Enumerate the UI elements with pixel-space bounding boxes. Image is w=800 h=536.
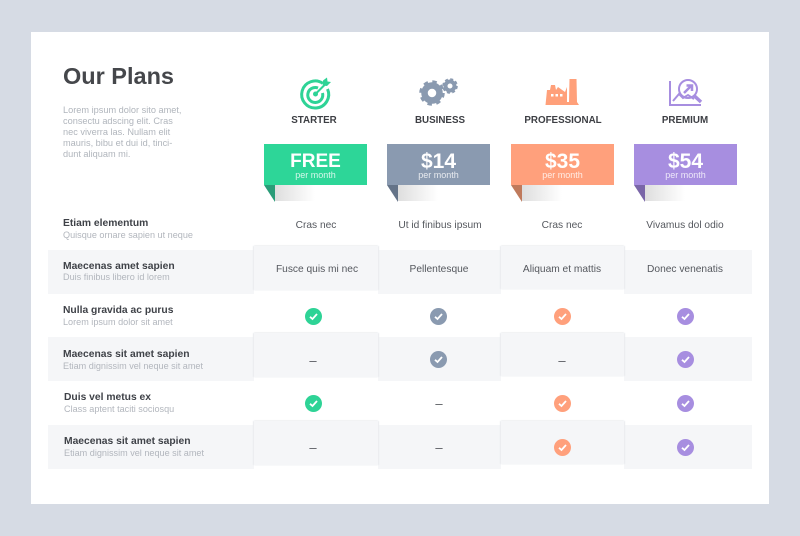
check: row 3 starter — [305, 308, 322, 325]
check: row 5 premium — [677, 395, 694, 412]
intro text block: Lorem ipsum dolor sito amet, — [63, 105, 181, 115]
price tag: 35: $35 — [545, 150, 580, 173]
row label 4 — [63, 349, 203, 371]
row label 2: Maecenas amet sapien — [63, 261, 175, 272]
row label 6: Maecenas sit amet sapien — [64, 436, 190, 447]
cell text row 1 business: Ut id finibus ipsum — [398, 220, 482, 231]
icon: gears — [419, 78, 458, 106]
raised cell: starter row 6 — [254, 421, 378, 465]
cell text row 2 professional: Aliquam et mattis — [523, 264, 601, 275]
dash: row 5 business: – — [435, 396, 443, 411]
intro text block: nec viverra las. Nullam elit — [63, 127, 170, 137]
price tag: 35: per month — [542, 170, 583, 180]
row label 3: Nulla gravida ac purus — [63, 305, 173, 316]
price tag: 54 — [634, 144, 737, 202]
check: row 4 premium — [677, 351, 694, 368]
price tag: 14: per month — [418, 170, 459, 180]
check: row 6 premium — [677, 439, 694, 456]
price tag: free: FREE — [290, 151, 341, 172]
raised cell: professional row 6 — [501, 421, 624, 464]
title: Our Plans — [63, 63, 174, 89]
icon: target — [300, 78, 331, 110]
intro text block: consectu adscing elit. Cras — [63, 116, 173, 126]
plan name: premium: PREMIUM — [662, 115, 708, 126]
cell text row 1 starter: Cras nec — [296, 220, 336, 231]
dash: row 4 starter: – — [309, 353, 317, 368]
raised cell: starter row 2 — [254, 246, 378, 290]
cell text row 2 business: Pellentesque — [410, 264, 468, 275]
raised cell: starter row 4 — [254, 333, 378, 377]
row label 3: Lorem ipsum dolor sit amet — [63, 317, 173, 327]
row label 4: Maecenas sit amet sapien — [63, 349, 189, 360]
row label 2: Duis finibus libero id lorem — [63, 272, 170, 282]
price tag: 35 — [511, 144, 614, 202]
intro text block: mauris, bibu et dui id, tinci- — [63, 138, 172, 148]
plan name: business: BUSINESS — [415, 115, 465, 126]
dash: row 6 starter: – — [309, 440, 317, 455]
price tag: free: per month — [295, 170, 336, 180]
price tag: free — [264, 144, 367, 202]
row label 6: Etiam dignissim vel neque sit amet — [64, 448, 204, 458]
icon: factory — [546, 79, 579, 105]
price tag: 54: per month — [665, 170, 706, 180]
row label 6 — [64, 436, 204, 458]
row band 6 — [48, 425, 752, 469]
price tag: 14 — [387, 144, 490, 202]
check: row 5 professional — [554, 395, 571, 412]
price tag: 14: $14 — [421, 150, 456, 173]
row label 5: Duis vel metus ex — [64, 392, 151, 403]
row label 3 — [63, 305, 174, 327]
row label 5 — [64, 392, 174, 414]
check: row 4 business — [430, 351, 447, 368]
row label 5: Class aptent taciti sociosqu — [64, 404, 174, 414]
check: row 6 professional — [554, 439, 571, 456]
price tag: 54: $54 — [668, 150, 703, 173]
row label 1 — [63, 218, 193, 240]
cell text row 2 starter: Fusce quis mi nec — [276, 264, 358, 275]
row band 2 — [48, 250, 752, 294]
cell text row 2 premium: Donec venenatis — [647, 264, 723, 275]
row label 4: Etiam dignissim vel neque sit amet — [63, 361, 203, 371]
check: row 3 premium — [677, 308, 694, 325]
row band 4 — [48, 337, 752, 381]
cell text row 1 professional: Cras nec — [542, 220, 582, 231]
row label 2 — [63, 261, 175, 282]
icon: chart with magnifier — [669, 79, 702, 106]
dash: row 4 professional: – — [558, 353, 566, 368]
intro text block: dunt aliquam mi. — [63, 149, 130, 159]
plan name: starter: STARTER — [291, 115, 337, 126]
raised cell: professional row 2 — [501, 246, 624, 289]
check: row 5 starter — [305, 395, 322, 412]
intro text block — [63, 105, 181, 159]
row label 1: Etiam elementum — [63, 218, 148, 229]
row label 1: Quisque ornare sapien ut neque — [63, 230, 193, 240]
dash: row 6 business: – — [435, 440, 443, 455]
raised cell: professional row 4 — [501, 333, 624, 376]
cell text row 1 premium: Vivamus dol odio — [646, 220, 724, 231]
check: row 3 business — [430, 308, 447, 325]
check: row 3 professional — [554, 308, 571, 325]
plan name: professional: PROFESSIONAL — [524, 115, 602, 126]
